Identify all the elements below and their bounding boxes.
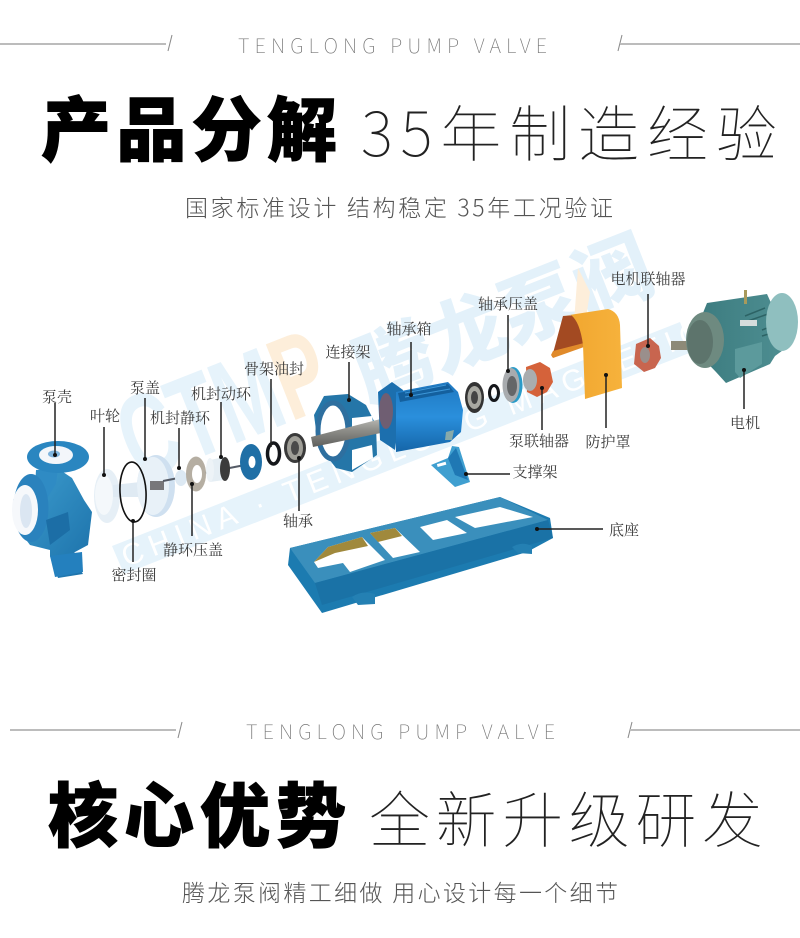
part labels: 骨架油封 <box>244 360 304 378</box>
part: oil seal <box>268 443 280 464</box>
part: motor <box>671 290 798 383</box>
part: bearing housing <box>378 382 463 452</box>
part: motor coupling <box>634 338 661 372</box>
part: impeller <box>94 469 140 523</box>
part: rear oil seal <box>490 386 498 400</box>
part: pump coupling <box>523 362 553 397</box>
title: product breakdown: 35年制造经验 <box>361 85 777 174</box>
watermark: CTMP <box>99 305 348 506</box>
title: product breakdown: 产品分解 <box>41 75 337 176</box>
top header strip: TENGLONG PUMP VALVE <box>238 30 547 59</box>
bottom header strip <box>10 716 800 745</box>
part: connecting bracket <box>311 394 400 472</box>
part: sealing ring <box>118 461 148 523</box>
part: bearing <box>284 433 306 463</box>
part: guard <box>551 309 622 399</box>
part labels: 支撑架 <box>512 463 558 481</box>
part labels: 泵联轴器 <box>509 433 569 450</box>
leader lines <box>53 294 746 562</box>
part labels: 底座 <box>609 521 639 539</box>
part: pump cover <box>137 455 175 517</box>
subtitle: product breakdown: 国家标准设计 结构稳定 35年工况验证 <box>185 189 613 223</box>
subtitle: core advantages: 腾龙泵阀精工细做 用心设计每一个细节 <box>182 874 618 908</box>
part labels: 机封动环 <box>191 386 252 403</box>
part labels: 轴承压盖 <box>478 296 538 313</box>
part: rear bearing <box>465 382 484 413</box>
bottom header strip: TENGLONG PUMP VALVE <box>246 716 555 745</box>
title: core advantages <box>48 761 763 862</box>
part labels: 密封圈 <box>111 567 157 584</box>
part: pump casing <box>12 441 92 578</box>
part labels: 连接架 <box>325 343 371 361</box>
part labels: 泵壳 <box>42 388 72 406</box>
watermark: 腾龙泵阀 <box>342 222 665 418</box>
part: mechanical seal group <box>163 444 262 492</box>
part labels: 电机联轴器 <box>610 270 686 288</box>
part labels: 机封静环 <box>150 410 211 427</box>
part labels: 轴承 <box>283 513 313 530</box>
part labels: 轴承箱 <box>386 321 432 338</box>
top header strip <box>0 30 800 59</box>
part labels: 静环压盖 <box>163 542 223 559</box>
title: core advantages: 全新升级研发 <box>369 771 763 860</box>
part: base frame <box>288 497 553 613</box>
part labels <box>42 270 760 584</box>
part labels: 叶轮 <box>90 408 120 425</box>
part labels: 防护罩 <box>585 434 631 451</box>
title: core advantages: 核心优势 <box>48 761 346 862</box>
part: bearing gland <box>502 367 522 403</box>
part labels: 电机 <box>730 414 760 432</box>
part labels: 泵盖 <box>130 380 160 397</box>
part: support bracket <box>431 446 470 487</box>
title: product breakdown <box>41 75 777 176</box>
